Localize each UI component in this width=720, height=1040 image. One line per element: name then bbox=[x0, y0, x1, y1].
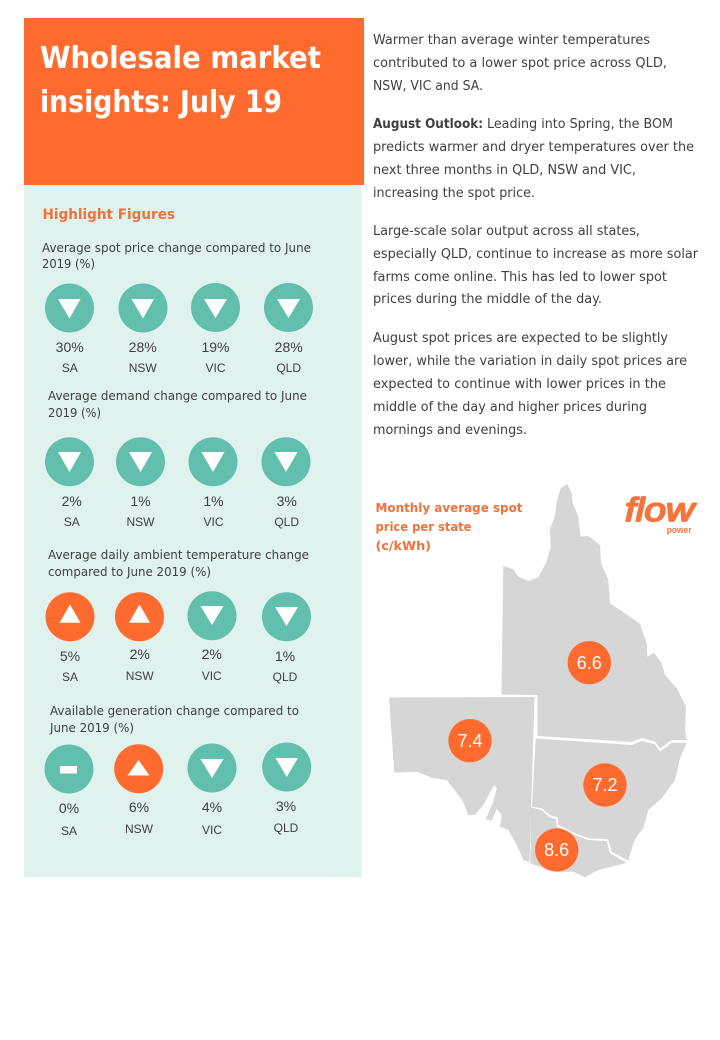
heading: demand bbox=[48, 388, 307, 420]
indicator: SA down 30% bbox=[45, 284, 94, 375]
map heading: price per state bbox=[376, 519, 472, 534]
panel: highlight figures background bbox=[24, 185, 362, 877]
indicator: SA no change 0% bbox=[44, 744, 94, 838]
map heading: Monthly average spot bbox=[376, 500, 523, 515]
heading: generation: Available generation change compared to bbox=[50, 703, 299, 718]
text block: August outlook: Leading into Spring, the BOM bbox=[487, 117, 673, 132]
marker: QLD 6.6 bbox=[568, 641, 611, 684]
indicator: QLD down 1% bbox=[262, 592, 311, 684]
indicator: QLD down 3% bbox=[262, 437, 310, 529]
state: SA bbox=[389, 697, 534, 862]
text block: August outlook: next three months in QLD, NSW and VIC, bbox=[373, 163, 636, 178]
text block: August outlook: predicts warmer and dryer temperatures over the bbox=[373, 140, 694, 155]
heading: demand: Average demand change compared to June bbox=[48, 388, 307, 403]
indicator: NSW down 28%: NSW bbox=[129, 361, 157, 375]
indicator: NSW up 2%: NSW bbox=[126, 669, 154, 683]
group: spot price change bbox=[42, 240, 313, 375]
text block: large-scale solar: farms come online. This has led to lower spot bbox=[373, 270, 667, 285]
indicator: VIC down 1%: 1% bbox=[203, 493, 224, 509]
indicator: VIC down 19% bbox=[191, 283, 240, 375]
text block: August outlook: August Outlook: bbox=[373, 117, 483, 132]
text block: intro: NSW, VIC and SA. bbox=[373, 79, 483, 94]
indicator: SA no change 0%: SA bbox=[61, 824, 77, 838]
indicator: QLD down 28%: 28% bbox=[275, 339, 303, 355]
title: insights: July 19 bbox=[40, 85, 282, 120]
heading: spot price bbox=[42, 240, 311, 271]
indicator: NSW up 6%: NSW bbox=[125, 822, 154, 836]
heading: spot price: 2019 (%) bbox=[42, 256, 95, 271]
text block: large-scale solar bbox=[373, 224, 699, 307]
indicator: VIC down 1%: VIC bbox=[203, 515, 224, 529]
text block: large-scale solar: especially QLD, continue to increase as more solar bbox=[373, 247, 699, 262]
group: ambient temperature change bbox=[46, 547, 311, 684]
indicator: SA down 30%: SA bbox=[62, 361, 78, 375]
indicator: NSW up 6% bbox=[114, 744, 163, 836]
logo: Flow Power: power bbox=[667, 525, 692, 535]
text block: intro: contributed to a lower spot price across QLD, bbox=[373, 56, 667, 71]
group: available generation change bbox=[44, 703, 311, 838]
indicator: QLD down 1%: QLD bbox=[273, 670, 298, 684]
title: Wholesale market bbox=[40, 41, 321, 76]
heading: demand: 2019 (%) bbox=[48, 405, 101, 420]
indicator: VIC down 2%: VIC bbox=[202, 669, 222, 683]
indicator: VIC down 19%: 19% bbox=[201, 339, 230, 355]
marker: VIC 8.6 bbox=[535, 828, 578, 872]
heading: highlight figures: Highlight Figures bbox=[42, 207, 175, 223]
indicator: NSW up 2%: 2% bbox=[130, 646, 150, 662]
text block: intro bbox=[373, 33, 667, 94]
heading: temperature bbox=[48, 547, 309, 579]
state: NSW bbox=[532, 738, 687, 861]
indicator: NSW up 6%: 6% bbox=[129, 799, 149, 815]
marker: VIC 8.6: 8.6 bbox=[544, 840, 569, 860]
indicator: QLD down 3%: QLD bbox=[274, 821, 299, 835]
heading: temperature: compared to June 2019 (%) bbox=[48, 564, 211, 579]
indicator: SA down 2%: SA bbox=[64, 515, 80, 529]
marker: NSW 7.2 bbox=[583, 763, 627, 807]
indicator: VIC down 2%: 2% bbox=[202, 646, 222, 662]
marker: SA 7.4 bbox=[448, 719, 492, 762]
heading: temperature: Average daily ambient temperature change bbox=[48, 547, 309, 562]
indicator: SA down 30%: 30% bbox=[56, 339, 84, 355]
text block: August outlook: increasing the spot price. bbox=[373, 186, 535, 201]
text block: large-scale solar: prices during the middle of the day. bbox=[373, 292, 602, 307]
text block: August spot prices: August spot prices are expected to be slightly bbox=[373, 331, 668, 346]
indicator: QLD down 1%: 1% bbox=[275, 648, 295, 664]
text block: August spot prices: mornings and evenings. bbox=[373, 423, 527, 438]
marker: QLD 6.6: 6.6 bbox=[577, 653, 602, 673]
indicator: NSW down 1%: 1% bbox=[130, 493, 151, 509]
indicator: QLD down 3% bbox=[262, 742, 311, 835]
text block: intro: Warmer than average winter temperatures bbox=[373, 33, 650, 48]
indicator: QLD down 3%: 3% bbox=[276, 798, 296, 814]
indicator: NSW down 1% bbox=[116, 437, 165, 529]
group: demand change bbox=[45, 388, 310, 529]
indicator: SA down 2% bbox=[45, 437, 94, 529]
text block: large-scale solar: Large-scale solar output across all states, bbox=[373, 224, 640, 239]
indicator: QLD down 28% bbox=[264, 283, 313, 375]
indicator: VIC down 19%: VIC bbox=[205, 361, 226, 375]
logo: Flow Power: flow bbox=[625, 491, 697, 528]
indicator: SA up 5%: SA bbox=[62, 670, 78, 684]
indicator: VIC down 4%: 4% bbox=[202, 799, 222, 815]
indicator: NSW up 2% bbox=[115, 592, 164, 683]
indicator: QLD down 3%: 3% bbox=[277, 493, 297, 509]
indicator: SA up 5% bbox=[46, 592, 94, 684]
indicator: VIC down 4% bbox=[188, 744, 236, 837]
indicator: SA no change 0%: 0% bbox=[59, 800, 79, 816]
text block: August spot prices: expected to continue with lower prices in the bbox=[373, 377, 666, 392]
indicator: QLD down 28%: QLD bbox=[276, 361, 301, 375]
state: QLD bbox=[502, 484, 687, 748]
map heading: (c/kWh) bbox=[376, 538, 431, 553]
map heading bbox=[376, 500, 523, 553]
indicator: VIC down 4%: VIC bbox=[202, 823, 222, 837]
heading: generation: June 2019 (%) bbox=[49, 720, 134, 735]
indicator: SA up 5%: 5% bbox=[60, 648, 80, 664]
title bbox=[40, 41, 321, 120]
title panel bbox=[24, 18, 364, 185]
text block: August spot prices bbox=[373, 331, 687, 438]
indicator: QLD down 3%: QLD bbox=[274, 515, 299, 529]
text block: August outlook bbox=[373, 117, 694, 201]
marker: SA 7.4: 7.4 bbox=[457, 731, 483, 751]
indicator: NSW down 28%: 28% bbox=[129, 339, 157, 355]
logo: Flow Power bbox=[625, 491, 697, 535]
heading: spot price: Average spot price change compared to June bbox=[42, 240, 311, 255]
marker: NSW 7.2: 7.2 bbox=[592, 775, 618, 795]
indicator: NSW down 1%: NSW bbox=[126, 515, 155, 529]
indicator: VIC down 1% bbox=[188, 437, 238, 529]
map of eastern Australia bbox=[389, 484, 687, 877]
indicator: VIC down 2% bbox=[188, 591, 236, 683]
text block: August spot prices: middle of the day and higher prices during bbox=[373, 400, 647, 415]
indicator: NSW down 28% bbox=[118, 284, 168, 375]
text block: August spot prices: lower, while the variation in daily spot prices are bbox=[373, 354, 687, 369]
indicator: SA down 2%: 2% bbox=[62, 493, 82, 509]
state: VIC bbox=[530, 807, 627, 877]
heading: generation bbox=[49, 703, 299, 735]
